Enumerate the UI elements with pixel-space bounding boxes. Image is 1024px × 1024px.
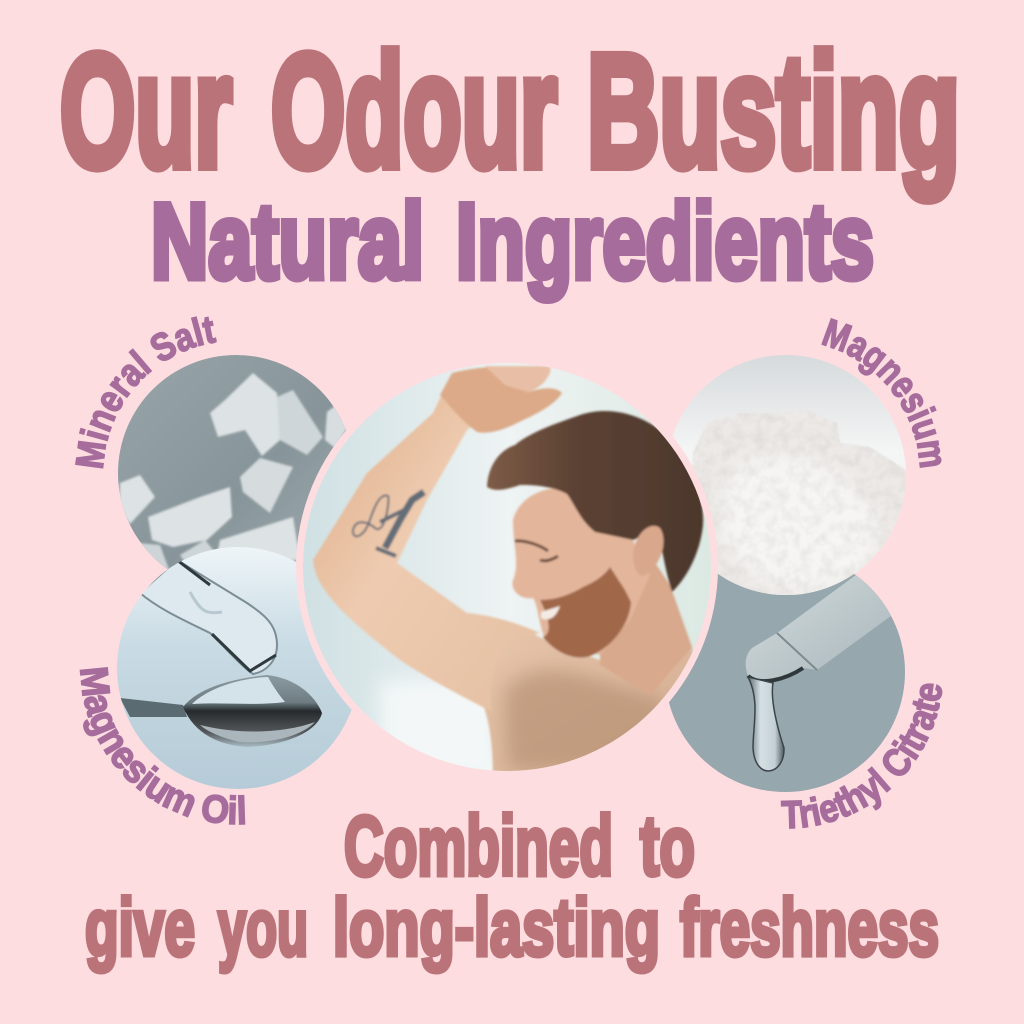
eye and brow <box>515 541 558 561</box>
label: Magnesium: Magnesium <box>821 318 942 468</box>
arm <box>313 373 540 712</box>
subtitle: Natural Ingredients <box>151 181 874 301</box>
neck <box>600 540 692 695</box>
title: Our Odour Busting <box>60 21 960 200</box>
title: Our Odour Busting: Our <box>60 21 232 200</box>
face <box>512 488 650 655</box>
photo: mineral salt <box>118 355 346 570</box>
hand <box>440 366 562 433</box>
photo: triethyl citrate backdrop <box>669 574 905 792</box>
dropper bottle <box>746 572 895 771</box>
closing line: give you long-lasting freshness <box>85 883 939 973</box>
subtitle: Natural Ingredients: Ingredients <box>456 181 874 301</box>
central ring <box>296 356 718 778</box>
spoon bowl <box>183 675 322 747</box>
beard <box>540 567 631 658</box>
torso <box>484 633 694 771</box>
title: Our Odour Busting: Odour <box>271 21 557 200</box>
chest hair <box>504 670 665 770</box>
hair <box>487 411 703 592</box>
closing line: give you long-lasting freshness: long-lasting <box>333 883 660 973</box>
closing line: give you long-lasting freshness: you <box>218 883 308 973</box>
closing line: Combined to: to <box>640 799 695 893</box>
subtitle: Natural Ingredients: Natural <box>151 181 424 301</box>
closing line: give you long-lasting freshness: give <box>85 883 195 973</box>
spoon handle <box>120 698 187 717</box>
photo: man raising arm <box>300 360 720 780</box>
fingers <box>485 366 550 392</box>
infographic canvas <box>60 45 957 974</box>
label: Magnesium Oil: Magnesium Oil <box>80 667 246 825</box>
label: Triethyl Citrate: Triethyl Citrate <box>780 683 942 829</box>
label: Mineral Salt: Mineral Salt <box>75 316 217 469</box>
photo: magnesium oil on spoon <box>117 547 359 789</box>
drop <box>748 677 784 771</box>
photo: magnesium powder <box>666 355 910 600</box>
ear <box>633 526 664 576</box>
smile <box>541 606 560 620</box>
tattoo <box>353 492 424 556</box>
pipette <box>140 560 277 674</box>
closing line: Combined to: Combined <box>344 799 613 893</box>
